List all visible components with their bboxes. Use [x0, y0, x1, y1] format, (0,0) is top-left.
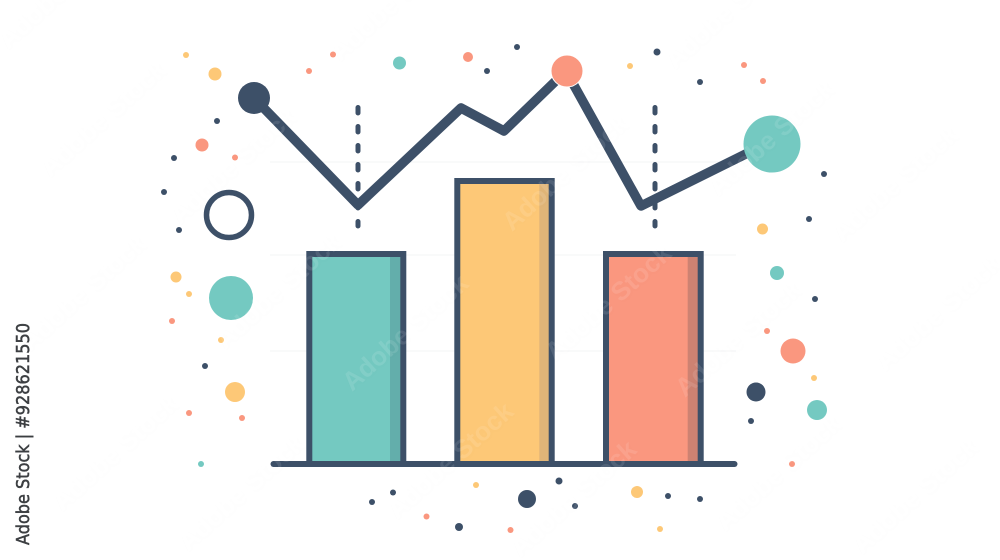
- watermark: repeated stock text: Adobe Stock: [34, 53, 173, 182]
- watermark: repeated stock text: Adobe Stock: [539, 237, 678, 366]
- watermark: repeated stock text: Adobe Stock: [709, 407, 848, 536]
- bar: yellow: [457, 181, 552, 464]
- line marker: navy: [238, 82, 270, 114]
- watermark: repeated stock text: Adobe Stock: [172, 427, 311, 556]
- watermark: repeated stock text: Adobe Stock: [669, 273, 808, 402]
- watermark: stock id: Adobe Stock | #928621550: [13, 323, 34, 545]
- dashed guide lines: [358, 108, 655, 226]
- watermark: repeated stock text: Adobe Stock: [381, 395, 520, 524]
- chart baseline: [274, 461, 734, 467]
- ring: [206, 192, 252, 238]
- watermark: repeated stock text: Adobe Stock: [46, 387, 185, 516]
- watermark: repeated stock text: Adobe Stock: [846, 430, 985, 559]
- scattered confetti dots: [161, 44, 827, 533]
- watermark: repeated stock text: Adobe Stock: [504, 433, 643, 560]
- watermark: repeated stock text: Adobe Stock: [826, 118, 965, 247]
- watermark: repeated stock text: Adobe Stock: [702, 72, 841, 201]
- watermark: repeated stock text: Adobe Stock: [209, 225, 348, 354]
- line marker: teal: [744, 116, 800, 172]
- bar: coral: [606, 254, 701, 464]
- line marker: coral: [551, 55, 583, 87]
- line chart: [238, 55, 800, 206]
- watermark: repeated stock text: Adobe Stock: [164, 100, 303, 229]
- bar: teal: [309, 254, 404, 464]
- watermark: repeated stock text: Adobe Stock: [14, 227, 153, 356]
- watermark: repeated stock text: Adobe Stock: [496, 107, 635, 236]
- watermark: repeated stock text: Adobe Stock: [336, 267, 475, 396]
